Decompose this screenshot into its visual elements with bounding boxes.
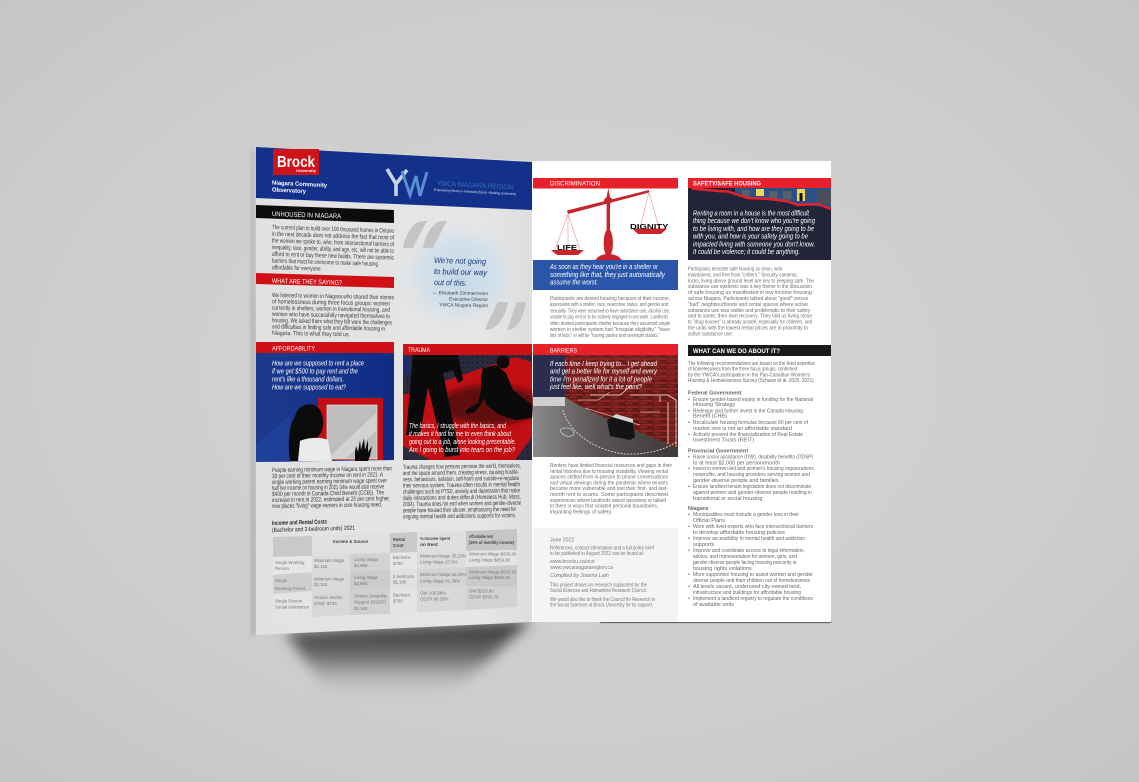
quote: something like that, they just automatically: [550, 270, 665, 279]
text: unhoused intro: affordable for everyone.: [272, 264, 322, 273]
recommendations: niagara: •: [688, 536, 690, 542]
recommendations: niagara: to develop affordable housing policies: [693, 530, 785, 536]
illustration: brick wall and suitcase: [533, 355, 678, 457]
recommendations: niagara: Niagara: [688, 506, 709, 512]
table cells: ODSP $350.70: [469, 594, 499, 600]
text: substance use was visible and problematic to their safety: [688, 308, 810, 314]
recommendations: niagara: infrastructure and buildings for affordable housing: [693, 590, 801, 596]
text: experiences where landlords asked questions or talked: [550, 498, 666, 504]
recommendations: federal: Actively prevent the financialization of Real Estate: [693, 432, 803, 438]
quote text: [434, 256, 488, 288]
text: affordability: single working parent earning minimum wage spent over: [272, 477, 387, 486]
panel: contact box: We would also like to thank the Council for Research in: [550, 597, 655, 603]
recommendations: niagara: •: [688, 524, 690, 530]
YW logo: [387, 169, 427, 196]
quote: [408, 421, 516, 454]
recommendations: provincial: gender-diverse people and families: [693, 478, 779, 484]
attribution: — Elisabeth Zimmermann: [433, 290, 488, 297]
quote text: to build our way: [434, 267, 488, 277]
panel: contact box: www.brocku.ca/nco: [550, 559, 595, 565]
recommendations: niagara: •: [688, 512, 690, 518]
text: trauma: ness, behaviours, isolation, self-harm and suicide-re-regulate: [403, 475, 519, 483]
text: of safe housing as manifested in low income housing: [688, 290, 812, 296]
text: often denied participants shelter because they assumed single: [550, 321, 670, 327]
table heading: [272, 519, 356, 534]
text: trauma: [403, 463, 521, 521]
text: unhoused intro: barriers that must be overcome to make safe housing: [272, 258, 378, 268]
recommendations: niagara: gender-diverse people facing housing precarity or: [693, 560, 797, 566]
recommendations: niagara: supports: [693, 542, 714, 548]
Niagara Community Observatory: [272, 181, 328, 196]
table headers: [333, 534, 514, 549]
Brock logo: University: [296, 169, 317, 173]
text: lots of kids," or will be "having parties and overnight stands.": [550, 333, 660, 339]
text: the units with the lowest rental prices are in proximity to: [688, 326, 808, 332]
recommendations: provincial: Provincial Government: [688, 448, 748, 454]
text: across Niagara. Participants talked about "good" versus: [688, 296, 808, 302]
panel: contact box: This project draws on research supported by the: [550, 582, 647, 588]
table cells: Person: [275, 566, 289, 571]
recommendations: federal: Federal Government: [688, 390, 742, 396]
recommendations: niagara: Improve accessibility to mental health and addiction: [693, 536, 805, 542]
table headers: (30% of monthly income): [469, 540, 514, 546]
text: and to some, their own recovery. They told us living close: [688, 314, 812, 320]
text: became more vulnerable and lost their first- and last-: [550, 486, 668, 492]
recommendations: provincial: nonprofits, and housing providers serving women and: [693, 472, 810, 478]
recommendations: niagara: diverse people and their children out of homelessness: [693, 578, 810, 584]
quote: to be living with, and how are they going to be: [693, 224, 814, 233]
quote: [272, 358, 364, 392]
quote: going out to a job, alone looking presentable.: [409, 437, 516, 446]
table cells: $2,116: [314, 564, 328, 569]
icon: scales: [551, 188, 668, 261]
table cells: Minimum Wage: [314, 576, 345, 582]
recommendations: niagara: All levels vacant, underused city-owned land,: [693, 584, 801, 590]
recommendations: niagara: •: [688, 584, 690, 590]
recommendations: niagara: Municipalities must include a gender lens in their: [693, 512, 799, 518]
table cells: Support (ODSP): [354, 600, 387, 604]
quote: If each time I keep trying to... I get ahead: [550, 359, 658, 368]
panel: affordability: [256, 342, 394, 462]
quote: Am I going to burst into tears on the job?: [408, 445, 515, 454]
icon: scales: LIFE: [557, 243, 577, 252]
recommendations: provincial: Raise social assistance (OW), disability benefits (ODSP): [693, 454, 813, 460]
recommendations: niagara: •: [688, 572, 690, 578]
text: what are they saying: [271, 292, 394, 339]
YWCA Niagara Region: YWCA NIAGARA REGION: [437, 181, 513, 191]
brochure shadow: [251, 150, 831, 700]
table cells: $2,116: [314, 582, 328, 587]
recommendations: provincial: to at least $2,000 per person/month: [693, 460, 780, 466]
text: impacting feelings of safety.: [550, 509, 612, 515]
table cells: $1,186: [393, 580, 407, 584]
text: sexuality. They were assumed to have substance use, alcohol use,: [550, 308, 670, 314]
table: income and rental costs: [273, 529, 517, 620]
quote: just feel like, well what's the point?: [549, 382, 642, 391]
recommendations: provincial: transitional or social housing: [693, 496, 762, 502]
pull quote: [396, 219, 526, 331]
text: trauma: their nervous system. Trauma often results in mental health: [403, 481, 520, 490]
closing quote marks: [485, 302, 526, 330]
text: what are they saying: and difficulties in finding safe and affordable housing in: [272, 324, 385, 333]
text: affordability: half her income on housing in 2021 (she would also receive: [272, 483, 384, 492]
quote: thing because we don't know who you're going: [693, 216, 815, 225]
intro text: [688, 361, 815, 384]
recommendations: niagara: Official Plans: [693, 518, 725, 524]
table cells: Living Wage 41.38%: [420, 578, 460, 584]
text: Participants are denied housing because of their income,: [550, 296, 670, 302]
quote: The basics, I struggle with the basics, and: [409, 421, 507, 430]
quote: How are we supposed to rent a place: [272, 358, 364, 368]
text: [688, 266, 814, 337]
Brock logo: Brock: [277, 154, 315, 171]
panel: trauma: [403, 344, 540, 460]
text: trauma: daily interactions and duties difficult (Homeless Hub, Moss,: [403, 494, 521, 502]
header band: [256, 147, 532, 210]
intro text: of homelessness from the three focus groups, confirmed: [688, 367, 797, 373]
text: spaces shifted from in-person to phone conversations: [550, 475, 668, 481]
table cells: Single: [275, 578, 288, 583]
text: locks, living above ground level are key to keeping safe. The: [688, 278, 814, 284]
intro text: Housing & Homelessness Survey (Schwan et al. 2020, 2021).: [688, 378, 815, 384]
text: unhoused intro: inequality, race, gender, ability, and age, etc, will not be able to: [272, 244, 394, 255]
text: affordability: $400 per month in Canada Child Benefit (CCB)). The: [272, 489, 384, 498]
recommendations: federal: Redesign and further invest in the Canada Housing: [693, 408, 803, 414]
recommendations: provincial: [688, 448, 815, 502]
panel: trauma: TRAUMA: [408, 347, 430, 354]
text: active substance use.: [688, 331, 733, 337]
table cells: Social Assistance: [275, 604, 310, 610]
panel: contact box: June 2022: [550, 538, 574, 544]
table cells: $2,866: [354, 581, 368, 586]
text: trauma: ongoing mental health and addictions supports for victims.: [403, 512, 516, 521]
recommendations: provincial: •: [688, 484, 690, 490]
text: to "drug houses" is already unsafe, especially for children, and: [688, 320, 812, 326]
table headers: Income & Source: [333, 539, 368, 545]
table cells: Living Wage: [354, 557, 379, 562]
panel: contact box: Social Sciences and Humanities Research Council.: [550, 588, 647, 594]
table cells: Ontario Disability: [354, 594, 388, 598]
panel: contact box: www.ywcaniagararegion.ca: [550, 565, 613, 571]
quote: As soon as they hear you're in a shelter or: [549, 262, 658, 271]
text: what are they saying: We listened to women in Niagara who shared their stories: [272, 292, 394, 301]
recommendations: niagara: advice, and representation for women, girls, and: [693, 554, 797, 560]
illustration: silhouettes: [403, 355, 540, 460]
table heading: Income and Rental Costs: [272, 519, 328, 527]
text: unhoused intro: the women we spoke to, who, from intersectional barriers of: [272, 237, 394, 248]
table cells: Working Parent: [275, 586, 306, 591]
text: unhoused intro: in the next decade does not address the fact that most of: [272, 231, 394, 242]
Niagara Community Observatory: Observatory: [272, 188, 307, 195]
Brock logo: [273, 149, 319, 175]
icon: scales: DIGNITY: [630, 222, 668, 231]
recommendations: federal: •: [688, 420, 690, 426]
panel: discrimination: DISCRIMINATION: [550, 180, 600, 188]
panel: what can we do: [688, 345, 831, 608]
recommendations: provincial: Invest in women-led and women's housing organizations,: [693, 466, 815, 472]
table cells: Bachelor: [393, 555, 411, 560]
heading: unhoused: UNHOUSED IN NIAGARA: [272, 211, 341, 220]
text: trauma: people have housed their abuser, emphasizing the need for: [403, 506, 516, 514]
YWCA Niagara Region: [434, 180, 516, 196]
text: Renters have limited financial resources and gaps in their: [550, 463, 672, 469]
text: to them in ways that violated personal boundaries,: [550, 504, 658, 510]
text: affordability: 30 per cent of their monthly income on rent in 2021. A: [272, 471, 384, 480]
recommendations: niagara: housing rights violations: [693, 566, 752, 572]
table cells: $2,866: [354, 563, 368, 568]
panel: affordability: AFFORDABILITY: [272, 346, 315, 352]
table cells: Bachelor: [393, 592, 411, 598]
YWCA Niagara Region: Empowering Women • Advancing Equity • Building Community: [434, 188, 516, 196]
table cells: Living Wage $859.80: [469, 575, 511, 580]
recommendations: provincial: •: [688, 454, 690, 460]
table cells: Minimum Wage 35.23%: [420, 554, 467, 558]
text: rental histories due to housing instability. Viewing rental: [550, 469, 668, 475]
recommendations: federal: Housing Strategy: [693, 402, 735, 408]
attribution: Executive Director: [449, 296, 488, 303]
quote text: out of this.: [434, 278, 467, 288]
quote: How are we supposed to eat?: [272, 382, 346, 392]
recommendations: federal: •: [688, 432, 690, 438]
intro text: by the YWCA's participation in the Pan-Canadian Women's: [688, 372, 810, 378]
quote: It could be violence; it could be anything.: [693, 247, 800, 256]
recommendations: federal: •: [688, 408, 690, 414]
text: what are they saying: of homelessness during three focus groups: women: [272, 298, 390, 308]
table cells: Living Wage $859.80: [469, 558, 511, 562]
text: what are they saying: Niagara. This is what they told us.: [272, 330, 350, 338]
recommendations: provincial: •: [688, 466, 690, 472]
table cells: 2 bedroom: [393, 574, 414, 579]
right page: [532, 161, 831, 622]
table cells: Minimum Wage 56.05%: [420, 572, 467, 577]
recommendations: niagara: Work with lived experts who face intersectional barriers: [693, 524, 813, 530]
recommendations: niagara: Implement a landlord registry to regulate the conditions: [693, 596, 813, 602]
text: substance use epidemic was a key theme in the discussion: [688, 284, 812, 290]
table cells: $790: [393, 561, 403, 566]
table cells: Ontario Works: [314, 595, 343, 600]
recommendations: niagara: [688, 506, 813, 608]
table cells: ODSP 66.28%: [420, 596, 449, 602]
quote: [549, 359, 658, 391]
text: unable to pay rent or to be actively engaged in sex work. Landlords: [550, 315, 668, 321]
table cells: Single Person: [275, 598, 303, 604]
panel: contact box: Compiled by Joanna Lam: [550, 573, 610, 579]
attribution: [433, 290, 488, 309]
quote: time I'm penalized for it a lot of people: [550, 374, 652, 383]
table headers: Affordable rent: [469, 534, 493, 540]
text: trauma: and the space around them, creating stress, causing hostile-: [403, 469, 519, 477]
quote: if we get $500 to pay rent and the: [272, 366, 358, 376]
panel: discrimination: [533, 178, 678, 339]
table cells: $1,169: [354, 606, 368, 611]
text: affordability: [272, 465, 392, 510]
recommendations: federal: •: [688, 397, 690, 403]
recommendations: federal: market rent is not an affordable standard: [693, 426, 792, 432]
table heading: (Bachelor and 2-bedroom units) 2021: [272, 526, 356, 534]
quote: and get a better life for myself and every: [550, 367, 657, 376]
illustration: woman at window: [256, 398, 383, 462]
text: and virtual viewings during the pandemic where tenants: [550, 480, 668, 486]
table cells: Minimum Wage: [314, 558, 345, 563]
table cells: $790: [393, 598, 403, 604]
recommendations: niagara: •: [688, 596, 690, 602]
illustration: building windows: [688, 188, 831, 260]
text: "bad" neighbourhoods and rental spaces where active: [688, 302, 808, 308]
quote: impacted living with someone you don't know.: [693, 239, 815, 248]
recommendations: federal: Investment Trusts (REIT): [693, 438, 754, 444]
heading: unhoused: [256, 205, 394, 223]
table cells: Living Wage 27.6%: [420, 560, 458, 564]
panel: contact box: References, contact information and a full policy brief: [550, 546, 654, 552]
table cells: Single Working: [275, 560, 305, 565]
table cells: (OW): $733: [314, 601, 337, 606]
text: unhoused intro: The current plan to build over 100 thousand homes in Ontario: [272, 224, 394, 235]
recommendations: federal: Ensure gender-based equity in funding for the National: [693, 397, 813, 403]
text: association with a shelter, race, newcomer status, and gender and: [550, 302, 668, 308]
attribution: YWCA Niagara Region: [439, 302, 488, 309]
panel: safety: [688, 178, 831, 337]
recommendations: niagara: •: [688, 548, 690, 554]
text: month rent to scams. Some participants described: [550, 492, 668, 498]
text: trauma: Trauma changes how persons perceive the world, themselves,: [403, 463, 521, 471]
quote: with you, and how is your safety going to be: [693, 232, 808, 241]
table headers: Cost: [393, 543, 404, 549]
table cells: Living Wage: [354, 575, 379, 580]
recommendations: niagara: of available units: [693, 602, 734, 608]
quote: Renting a room in a house is the most difficult: [693, 208, 810, 218]
table cells: [275, 552, 517, 611]
heading: what are they saying: [256, 273, 394, 288]
recommendations: provincial: Ensure landlord-tenant legislation does not discriminate: [693, 484, 811, 490]
recommendations: niagara: Improve and coordinate access to legal information,: [693, 548, 805, 554]
intro text: The following recommendations are based on the lived expertise: [688, 361, 815, 367]
text: what are they saying: housing. We asked them what they felt were the challenges: [272, 317, 392, 327]
panel: barriers: [533, 344, 678, 515]
text: affordability: increase in rent in 2022, estimated at 25 per cent higher,: [272, 495, 390, 504]
table cells: Minimum Wage $635.69: [469, 552, 517, 556]
text: maintained, and free from "critters." Security cameras,: [688, 272, 798, 278]
recommendations: federal: Benefit (CHB): [693, 414, 727, 420]
quote: assume the worst.: [550, 278, 598, 287]
panel: contact box: the Social Sciences at Brock University for its support.: [550, 602, 653, 608]
table cells: OW 105.88%: [420, 590, 446, 596]
recommendations: federal: Recalculate housing formulas because 80 per cent of: [693, 420, 808, 426]
panel: barriers: BARRIERS: [550, 348, 577, 354]
text: Participants describe safe housing as clean, well-: [688, 266, 783, 272]
panel: contact box: to be published in August 2022 can be found at:: [550, 551, 644, 557]
opening quote marks: [403, 221, 447, 248]
text: [549, 296, 670, 339]
recommendations: provincial: against women and gender-diverse people residing in: [693, 490, 812, 496]
quote: [549, 262, 665, 287]
text: trauma: challenges such as PTSD, anxiety and depression that make: [403, 487, 520, 496]
text: trauma: 2004). Trauma does not end when women and gender-diverse: [403, 500, 521, 508]
panel: what can we do: WHAT CAN WE DO ABOUT IT?: [693, 348, 780, 355]
panel: contact box: [533, 528, 678, 622]
recommendations: federal: [688, 390, 813, 444]
table headers: % Income Spent: [420, 536, 450, 542]
quote: it makes it hard for me to even think about: [409, 429, 512, 438]
text: affordability: now places "living" wage earners in core housing need.: [272, 501, 382, 510]
heading: what are they saying: WHAT ARE THEY SAYING?: [272, 278, 342, 287]
table headers: Rental: [393, 537, 405, 543]
quote: rent's like a thousand dollars.: [272, 374, 344, 384]
text: women in shelter system had "irregular eligibility," "have: [549, 327, 670, 333]
quote text: We're not going: [434, 256, 486, 266]
quote: [693, 208, 815, 256]
table cells: OW $219.90: [469, 588, 494, 594]
text: unhoused intro: afford to rent or buy these new builds. There are systemic: [272, 251, 394, 262]
Niagara Community Observatory: Niagara Community: [272, 181, 328, 189]
text: [550, 463, 672, 515]
text: what are they saying: currently in shelters, women in transitional housing, and: [272, 305, 390, 314]
text: unhoused intro: [272, 224, 394, 275]
table headers: on Rent: [420, 542, 438, 548]
recommendations: niagara: More supportive housing to assist women and gender: [693, 572, 813, 578]
text: affordability: People earning minimum wage in Niagara spent more than: [272, 465, 392, 474]
left page: [256, 147, 532, 635]
panel: safety: SAFETY/SAFE HOUSING: [693, 180, 761, 188]
text: what are they saying: women who have successfully navigated themselves to: [271, 311, 390, 320]
table cells: Minimum Wage $635.69: [469, 570, 517, 574]
